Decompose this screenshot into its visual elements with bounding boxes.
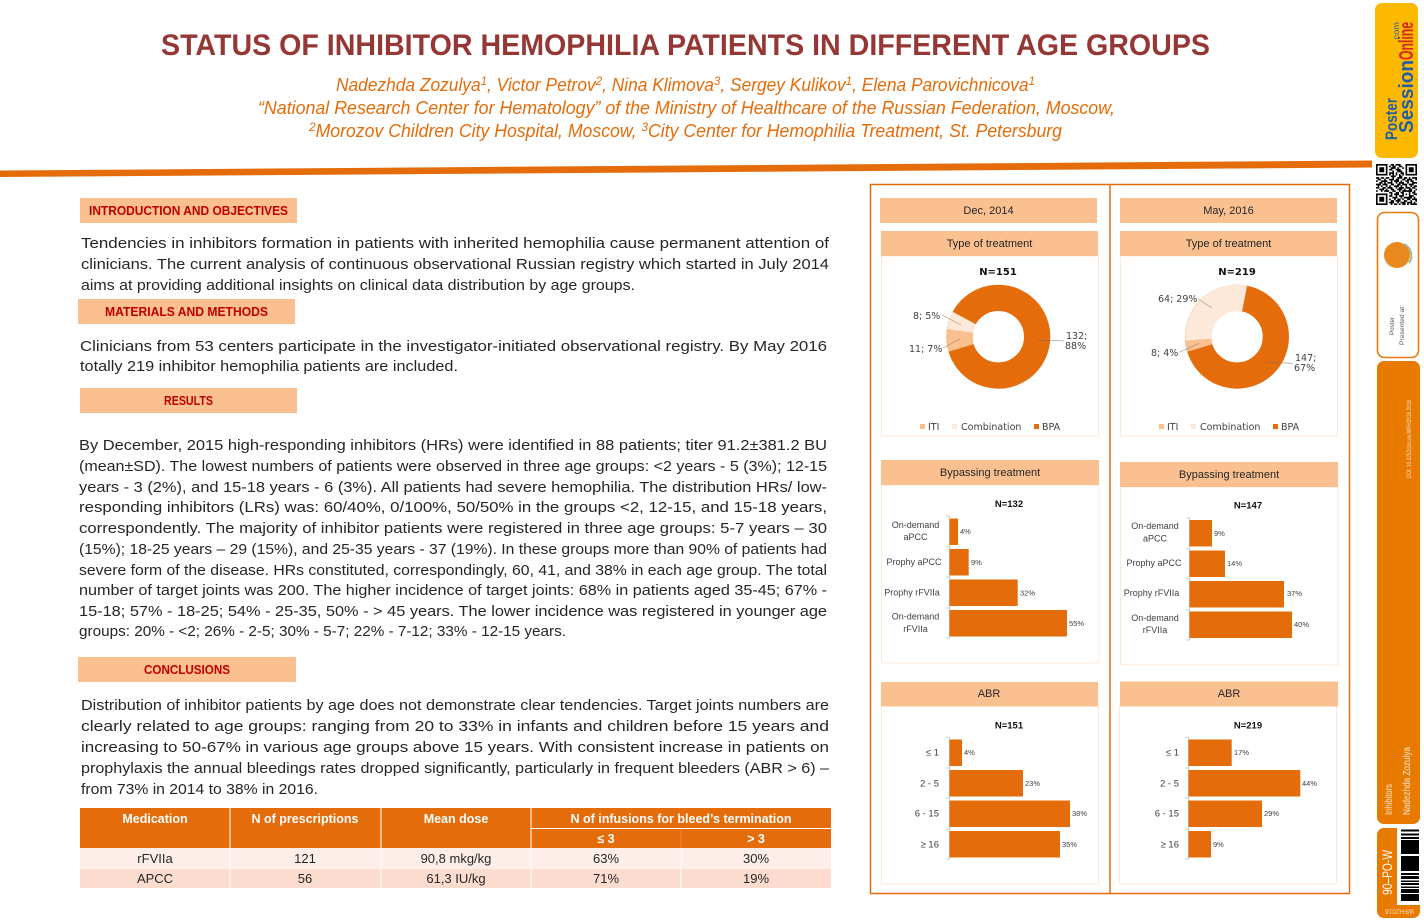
authors and affiliations: 3 — [641, 120, 648, 134]
sidebar: PosterSessionOnline logo: .com — [1392, 22, 1401, 42]
legend: 2016: BPA — [1281, 422, 1300, 433]
title: STATUS OF INHIBITOR HEMOPHILIA PATIENTS IN DIFFERENT AGE GROUPS — [161, 29, 1210, 62]
text block: results: severe form of the disease. HRs constituted, correspondingly, 60, 41, and 38% in each age group. The total — [79, 562, 827, 579]
authors and affiliations: 1 — [846, 74, 852, 88]
text block: introduction: clinicians. The current analysis of continuous observational Russian registry which started in July 2014 — [81, 256, 829, 273]
bar chart: bypassing 2014: Prophy aPCC — [886, 557, 942, 567]
section heading: results: RESULTS — [164, 394, 213, 408]
table: medication: 90,8 mkg/kg — [421, 851, 491, 866]
legend: 2016: ITI — [1167, 422, 1178, 433]
authors and affiliations: Morozov Children City Hospital, Moscow, — [316, 121, 641, 141]
heading: Dec, 2014: Dec, 2014 — [963, 205, 1014, 217]
text block: results: By December, 2015 high-responding inhibitors (HRs) were identified in 88 patients; titer 91.2±381.2 BU — [79, 437, 827, 454]
legend: 2014: BPA — [1042, 422, 1061, 433]
table: medication: Medication — [122, 812, 188, 826]
section heading: conclusions: CONCLUSIONS — [144, 663, 230, 677]
bar chart: ABR 2016: 44% — [1302, 779, 1317, 788]
text block: results: responding inhibitors (LRs) was: 60/40%, 0/100%, 50/50% in the groups <2, 12-15, and 15-18 years, — [79, 499, 827, 516]
panel: type of treatment 2016: Type of treatment — [1186, 238, 1271, 250]
bar chart: ABR 2016: ≤ 1 — [1166, 748, 1179, 758]
panel: ABR 2014: N=151 — [995, 720, 1024, 732]
text block: results: (15%); 18-25 years – 29 (15%), and 25-35 years - 37 (19%). In these groups more than 90% of patients had — [79, 541, 827, 558]
sidebar: poster number and barcode: 90–PO-W — [1379, 849, 1395, 895]
bar chart: ABR 2014: 6 - 15 — [915, 808, 939, 820]
donut chart: 2014: 88% — [1065, 341, 1086, 352]
panel: bypassing treatment 2014: Bypassing treatment — [940, 467, 1040, 479]
text block: conclusions: from 73% in 2014 to 38% in 2016. — [81, 781, 318, 798]
sidebar: PosterSessionOnline logo: Poster — [1382, 98, 1401, 140]
bar chart: ABR 2016: 6 - 15 — [1155, 808, 1179, 820]
authors and affiliations: “National Research Center for Hematology” of the Ministry of Healthcare of the Russian Federation, Moscow, — [258, 98, 1115, 118]
heading: Dec, 2014 — [880, 198, 1097, 223]
panel: type of treatment 2016 — [1120, 231, 1338, 436]
donut chart: 2016: 8; 4% — [1151, 348, 1178, 359]
bar chart: bypassing 2016: 14% — [1227, 559, 1242, 568]
text block: conclusions: Distribution of inhibitor patients by age does not demonstrate clear tendencies. Target joints numbers are — [81, 697, 829, 714]
donut chart: 2014 — [909, 298, 1087, 376]
bar chart: bypassing 2016: 9% — [1214, 529, 1225, 538]
bar chart: bypassing 2016: rFVIIa — [1143, 625, 1167, 635]
panel: type of treatment 2014 — [881, 231, 1098, 436]
table: medication: APCC — [137, 871, 173, 886]
bar chart: ABR 2014: ≥ 16 — [921, 840, 939, 850]
authors and affiliations: , Nina Klimova — [602, 75, 714, 95]
donut chart: 2016: 64; 29% — [1158, 294, 1197, 305]
text block: results: 15-18; 57% - 18-25; 54% - 25-35, 50% - > 45 years. The lower incidence was registered in younger age — [79, 603, 827, 620]
bar chart: bypassing 2016: aPCC — [1143, 534, 1168, 544]
bar chart: bypassing 2014: aPCC — [903, 532, 928, 542]
bar chart: bypassing 2016: On-demand — [1131, 521, 1179, 531]
heading: May, 2016: May, 2016 — [1203, 205, 1254, 217]
text block: introduction: aims at providing additional insights on clinical data distribution by age groups. — [81, 277, 635, 294]
table: medication: N of prescriptions — [252, 812, 359, 826]
donut chart: 2014: 8; 5% — [913, 311, 940, 322]
text block: conclusions: prophylaxis the annual bleedings rates dropped significantly, particularly in frequent bleeders (ABR > 6) – — [81, 760, 830, 777]
table: medication: 30% — [743, 851, 769, 866]
legend: 2016 — [1159, 422, 1300, 433]
authors and affiliations — [258, 74, 1115, 141]
authors and affiliations: 3 — [714, 74, 721, 88]
text block: results: years - 3 (2%), and 15-18 years - 6 (3%). All patients had severe hemophilia. The distribution HRs/ low- — [79, 479, 827, 496]
bar chart: bypassing 2014: 32% — [1020, 588, 1035, 598]
bar chart: ABR 2014: ≤ 1 — [926, 748, 939, 758]
donut chart: 2016 — [1151, 285, 1316, 376]
donut chart: 2014: 11; 7% — [909, 344, 942, 355]
section heading: materials and methods: MATERIALS AND METHODS — [105, 305, 268, 319]
sidebar: orange info bar — [1377, 361, 1420, 824]
table: medication: N of infusions for bleed’s termination — [570, 812, 792, 826]
bar chart: ABR 2014: 35% — [1062, 840, 1077, 849]
header rule — [0, 160, 1372, 177]
authors and affiliations: , Elena Parovichnicova — [852, 75, 1029, 95]
table: medication — [80, 808, 831, 888]
bar chart: ABR 2016: 17% — [1234, 748, 1249, 757]
text block: results: number of target joints was 200. The higher incidence of target joints: 68% in patients aged 35-45; 67% - — [79, 582, 827, 599]
text block: materials and methods: Clinicians from 53 centers participate in the investigator-initiated observational registry. By May 2016 — [80, 338, 827, 355]
table: medication: ≤ 3 — [597, 832, 615, 846]
sidebar: poster number and barcode: WFH2016 — [1385, 907, 1414, 916]
donut chart: 2016: 67% — [1294, 363, 1315, 374]
panel: type of treatment 2014: Type of treatment — [947, 238, 1032, 250]
panel: ABR 2016 — [1120, 682, 1338, 884]
text block: introduction: Tendencies in inhibitors formation in patients with inherited hemophilia cause permanent attention of — [81, 235, 830, 252]
bar chart: bypassing 2014: On-demand — [892, 520, 939, 530]
authors and affiliations: 1 — [481, 74, 487, 88]
panel: ABR 2016: ABR — [1218, 688, 1240, 700]
sidebar: orange info bar: Inhibitors — [1384, 784, 1395, 815]
authors and affiliations: City Center for Hemophilia Treatment, St. Petersburg — [648, 121, 1062, 141]
legend: 2014: ITI — [928, 422, 939, 433]
bar chart: bypassing 2014: 9% — [971, 558, 982, 567]
sidebar: poster presented at box: Poster — [1389, 316, 1396, 335]
panel: type of treatment 2016: N=219 — [1218, 267, 1256, 278]
table: medication: 61,3 IU/kg — [426, 871, 486, 886]
text block: conclusions: increasing to 50-67% in various age groups above 15 years. With consistent increase in patients on — [81, 739, 829, 756]
table: medication: 56 — [298, 871, 312, 886]
sidebar: poster number and barcode — [1377, 828, 1420, 918]
text block: materials and methods — [80, 338, 827, 375]
donut chart: 2014: 132; — [1066, 331, 1087, 342]
authors and affiliations: 2 — [308, 120, 316, 134]
table: medication: Mean dose — [424, 812, 488, 826]
panel: ABR 2014: ABR — [978, 688, 1000, 700]
text block: conclusions: clearly related to age groups: ranging from 20 to 33% in infants and children before 15 years and — [81, 718, 829, 735]
panel: ABR 2014 — [881, 682, 1098, 884]
text block: results: (mean±SD). The lowest numbers of patients were observed in three age groups: <2 years - 5 (3%); 12-15 — [79, 458, 827, 475]
text block: introduction — [81, 235, 830, 294]
table: medication: 121 — [294, 851, 316, 866]
bar chart: ABR 2014: 4% — [964, 748, 975, 757]
bar chart: bypassing 2014: Prophy rFVIIa — [884, 588, 940, 598]
sidebar: poster presented at box: Presented at: — [1399, 305, 1406, 345]
bar chart: ABR 2016 — [1155, 738, 1317, 859]
bar chart: bypassing 2014: rFVIIa — [903, 624, 928, 634]
legend: 2014 — [920, 422, 1061, 433]
panel: bypassing treatment 2014: N=132 — [995, 499, 1023, 510]
authors and affiliations: 1 — [1029, 74, 1035, 88]
authors and affiliations: Nadezhda Zozulya — [336, 75, 486, 95]
icon: WFH congress logo — [1384, 242, 1411, 268]
text block: results: correspondently. The majority of inhibitor patients were registered in three age groups: 5-7 years – 30 — [79, 520, 827, 537]
authors and affiliations: , Sergey Kulikov — [720, 75, 847, 95]
text block: results — [79, 437, 827, 640]
table: medication: > 3 — [747, 832, 765, 846]
panel: bypassing treatment 2016 — [1120, 462, 1338, 665]
bar chart: ABR 2014 — [915, 738, 1087, 859]
bar chart: bypassing 2016: On-demand — [1131, 613, 1179, 623]
section heading: conclusions — [78, 657, 296, 682]
bar chart: bypassing 2016: Prophy aPCC — [1126, 558, 1182, 568]
section heading: materials and methods — [78, 299, 295, 324]
text block: results: groups: 20% - <2; 26% - 2-5; 30% - 5-7; 22% - 7-12; 33% - 12-15 years. — [79, 623, 566, 640]
bar chart: bypassing 2014: 55% — [1069, 619, 1084, 628]
panel: type of treatment 2014: N=151 — [979, 267, 1017, 278]
legend: 2016: Combination — [1200, 422, 1260, 433]
bar chart: bypassing 2016: 37% — [1287, 589, 1302, 598]
table: medication: 19% — [743, 871, 769, 886]
authors and affiliations: , Victor Petrov — [487, 75, 597, 95]
sidebar: poster presented at box — [1378, 212, 1418, 358]
sidebar: PosterSessionOnline logo: Session — [1396, 60, 1418, 133]
QR code — [1376, 165, 1417, 204]
text block: materials and methods: totally 219 inhibitor hemophilia patients are included. — [80, 358, 458, 375]
bar chart: ABR 2014: 23% — [1025, 779, 1040, 788]
section heading: introduction: INTRODUCTION AND OBJECTIVES — [89, 204, 288, 218]
donut chart: 2016: 147; — [1295, 353, 1316, 364]
table: medication: rFVIIa — [137, 851, 173, 866]
section heading: introduction — [80, 198, 297, 223]
legend: 2014: Combination — [961, 422, 1021, 433]
panel: bypassing treatment 2014 — [881, 460, 1099, 663]
panel: bypassing treatment 2016: N=147 — [1234, 500, 1262, 512]
bar chart: ABR 2016: ≥ 16 — [1161, 840, 1179, 850]
table: medication: 63% — [593, 851, 619, 866]
bar chart: ABR 2016: 29% — [1264, 809, 1279, 818]
heading: May, 2016 — [1120, 198, 1337, 223]
authors and affiliations: 2 — [595, 74, 602, 88]
panel: bypassing treatment 2016: Bypassing treatment — [1179, 469, 1279, 481]
bar chart: ABR 2014: 2 - 5 — [920, 778, 939, 790]
bar chart: bypassing 2016: Prophy rFVIIa — [1124, 588, 1179, 598]
bar chart: bypassing 2016: 40% — [1294, 620, 1309, 629]
column divider — [1109, 184, 1111, 894]
sidebar: orange info bar: Nadezhda Zozulya — [1402, 747, 1413, 815]
bar chart: bypassing 2014 — [884, 516, 1084, 638]
table: medication: 71% — [593, 871, 619, 886]
sidebar: orange info bar: DOI: 10.3252/pso.eu.WFH2016.2016 — [1407, 399, 1413, 478]
bar chart: ABR 2014: 38% — [1072, 809, 1087, 818]
bar chart: bypassing 2014: On-demand — [892, 612, 939, 622]
bar chart: ABR 2016: 2 - 5 — [1160, 778, 1179, 790]
bar chart: ABR 2016: 9% — [1213, 840, 1224, 849]
sidebar: PosterSessionOnline logo — [1375, 3, 1418, 158]
text block: conclusions — [81, 697, 830, 798]
bar chart: bypassing 2014: 4% — [960, 527, 971, 536]
section heading: results — [80, 388, 297, 413]
panel: ABR 2016: N=219 — [1234, 720, 1262, 732]
bar chart: bypassing 2016 — [1124, 518, 1309, 640]
right charts frame — [870, 184, 1350, 894]
